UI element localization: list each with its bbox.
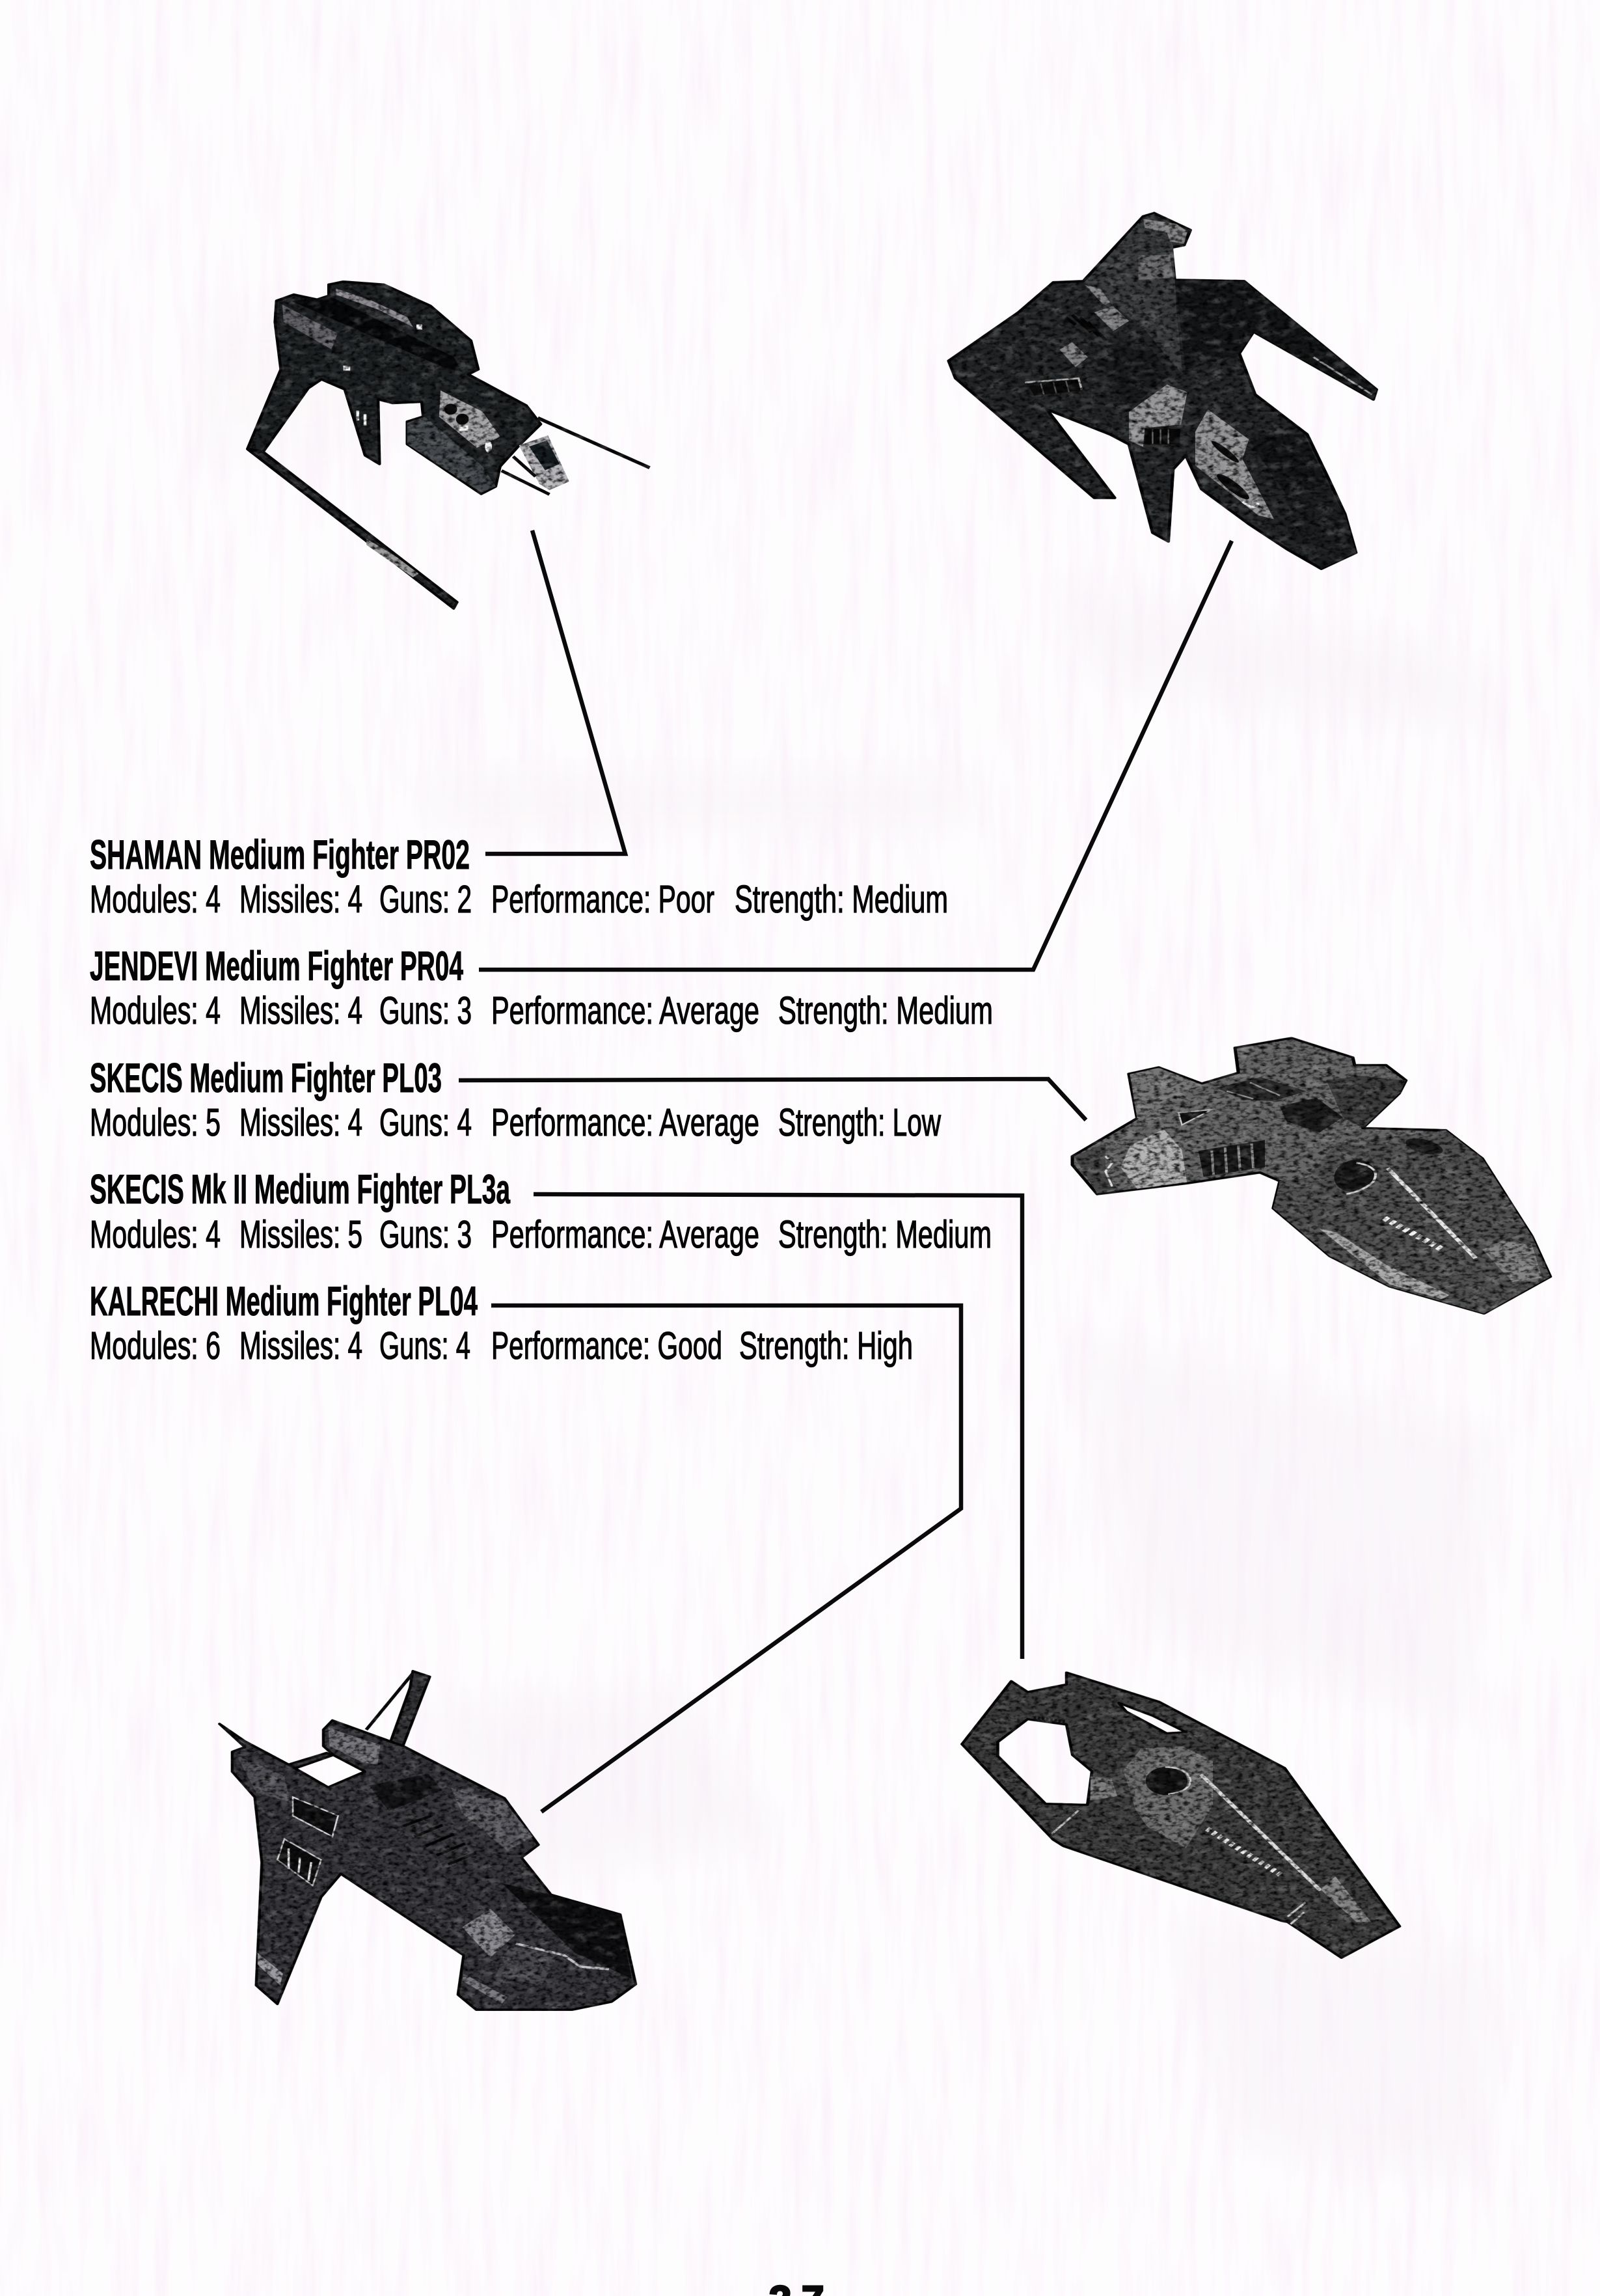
SHAMAN left facet [282, 305, 338, 349]
SKECIS lower wing [1273, 1130, 1551, 1313]
leader line: SHAMAN [485, 530, 625, 854]
leader line: SKECIS Mk II [534, 1194, 1022, 1659]
KALRECHI stats: Strength: High [739, 1324, 913, 1367]
SKECIS nose highlight [1105, 1156, 1112, 1186]
KALRECHI antenna [366, 1671, 429, 1746]
SHAMAN stats: Performance: Poor [491, 878, 714, 921]
SHAMAN dark stripe [291, 297, 463, 372]
SHAMAN long wing strut [248, 450, 457, 608]
SHAMAN title: SHAMAN Medium Fighter PR02 [90, 832, 470, 878]
SHAMAN nose [519, 435, 569, 490]
SKECIS Mk II stats: Modules: 4 [90, 1213, 221, 1256]
KALRECHI top hatch [369, 1774, 442, 1811]
KALRECHI title: KALRECHI Medium Fighter PL04 [90, 1279, 478, 1324]
JENDEVI central light panel [1129, 385, 1187, 447]
JENDEVI right wing [1174, 280, 1377, 400]
KALRECHI top fin [328, 1727, 381, 1764]
KALRECHI stats [90, 1324, 913, 1367]
SKECIS spine line [1388, 1168, 1476, 1258]
SHAMAN cockpit window [529, 441, 560, 471]
SKECIS Mk II tail highlight [1051, 1811, 1305, 1924]
JENDEVI top cap [1143, 219, 1187, 244]
JENDEVI vent 1 [1066, 315, 1105, 340]
KALRECHI right panel [451, 1788, 533, 1851]
SKECIS Mk II stats: Strength: Medium [778, 1213, 992, 1256]
SHAMAN lower block [407, 417, 496, 493]
KALRECHI nose highlights [516, 1943, 609, 1969]
SHAMAN strut mark [366, 539, 419, 577]
SKECIS Mk II title: SKECIS Mk II Medium Fighter PL3a [90, 1167, 511, 1212]
JENDEVI stats: Guns: 3 [379, 989, 472, 1032]
JENDEVI stats: Strength: Medium [778, 989, 993, 1032]
KALRECHI hull silhouette [219, 1721, 636, 2010]
SKECIS light wing edge [1320, 1229, 1449, 1300]
leader line: KALRECHI [491, 1305, 961, 1812]
SKECIS stats: Performance: Average [491, 1101, 759, 1144]
KALRECHI intake vent [293, 1797, 338, 1837]
KALRECHI stats: Missiles: 4 [239, 1324, 362, 1367]
SKECIS Mk II spine line [1201, 1775, 1320, 1891]
SKECIS nose [1074, 1143, 1117, 1194]
SKECIS stats [90, 1101, 941, 1144]
JENDEVI inner dark panel [1094, 336, 1170, 409]
spec block: JENDEVI [90, 944, 993, 1032]
KALRECHI stats: Modules: 6 [90, 1324, 221, 1367]
SKECIS title: SKECIS Medium Fighter PL03 [90, 1056, 442, 1101]
JENDEVI stats: Modules: 4 [90, 989, 221, 1032]
SKECIS Mk II side plate [1091, 1777, 1117, 1801]
SHAMAN top plate [336, 288, 413, 327]
SHAMAN stats: Strength: Medium [735, 878, 948, 921]
SKECIS Mk II stats [90, 1213, 992, 1256]
SHAMAN gun barrels [502, 456, 549, 495]
SKECIS engine ring [1329, 1156, 1380, 1195]
SKECIS top vent strip [1217, 1077, 1307, 1101]
KALRECHI wing root panel [236, 1755, 290, 1802]
JENDEVI stats: Missiles: 4 [239, 989, 362, 1032]
JENDEVI vent 2 [1025, 378, 1081, 396]
SHAMAN stats [90, 878, 948, 921]
JENDEVI highlight [1243, 502, 1258, 507]
leader line: JENDEVI [479, 541, 1232, 970]
KALRECHI stats: Guns: 4 [379, 1324, 470, 1367]
SHAMAN stats: Modules: 4 [90, 878, 221, 921]
SKECIS wing tail panel [1482, 1241, 1542, 1282]
JENDEVI stats: Performance: Average [491, 989, 759, 1032]
KALRECHI rear dark nose [502, 1883, 632, 1978]
SKECIS Mk II stats: Guns: 3 [379, 1213, 472, 1256]
SKECIS stats: Missiles: 4 [239, 1101, 362, 1144]
SKECIS stats: Modules: 5 [90, 1101, 221, 1144]
icon: KALRECHI fighter [219, 1671, 636, 2010]
icon: SHAMAN fighter [247, 282, 649, 608]
SKECIS Mk II frame comb [1034, 1718, 1066, 1723]
JENDEVI wing edge highlight [1314, 357, 1372, 394]
SKECIS upper block [1326, 1076, 1406, 1128]
SKECIS stats: Guns: 4 [379, 1101, 472, 1144]
SKECIS stats: Strength: Low [778, 1101, 941, 1144]
SHAMAN antenna line [538, 418, 649, 468]
JENDEVI hull silhouette [949, 213, 1377, 569]
SKECIS Mk II hull with cut-outs [962, 1673, 1400, 1958]
spec block: SKECIS [90, 1056, 941, 1144]
JENDEVI top column [1085, 214, 1182, 375]
SKECIS rear block [1130, 1068, 1202, 1121]
SKECIS hull silhouette [1072, 1038, 1551, 1313]
JENDEVI column panel [1139, 255, 1173, 280]
SKECIS Mk II tail plate [1320, 1876, 1371, 1922]
spec block: SKECIS Mk II [90, 1167, 992, 1256]
JENDEVI canopy [1249, 434, 1327, 495]
SHAMAN main hull [247, 282, 541, 494]
KALRECHI lower edge [462, 1974, 508, 2004]
KALRECHI mid light panel [462, 1909, 516, 1958]
JENDEVI stats [90, 989, 993, 1032]
KALRECHI central vent [403, 1816, 476, 1865]
SHAMAN stats: Guns: 2 [379, 878, 472, 921]
icon: JENDEVI fighter [949, 213, 1377, 569]
icon: SKECIS fighter [1072, 1038, 1551, 1313]
SHAMAN panel details [444, 403, 468, 424]
SHAMAN engine panel [439, 390, 500, 448]
KALRECHI wing tip light [258, 1953, 283, 1986]
JENDEVI grey blocks [1059, 285, 1129, 367]
SKECIS light panel [1120, 1129, 1187, 1189]
SKECIS Mk II engine [1146, 1767, 1191, 1795]
leader line: SKECIS [459, 1079, 1086, 1120]
JENDEVI title: JENDEVI Medium Fighter PR04 [90, 944, 463, 989]
JENDEVI cockpit side panel [1195, 409, 1274, 519]
SHAMAN stats: Missiles: 4 [239, 878, 362, 921]
SKECIS Mk II stats: Performance: Average [491, 1213, 759, 1256]
KALRECHI left strut [289, 1753, 332, 1768]
KALRECHI wing window [277, 1839, 321, 1885]
JENDEVI nose [1277, 485, 1356, 569]
icon: SKECIS Mk II fighter [962, 1673, 1400, 1958]
SKECIS top wing intake [1402, 1135, 1446, 1158]
SKECIS Mk II stats: Missiles: 5 [239, 1213, 362, 1256]
SKECIS engine bay [1280, 1098, 1343, 1132]
SKECIS side vent [1199, 1140, 1265, 1177]
spec block: KALRECHI [90, 1279, 913, 1367]
JENDEVI engine slots [1209, 439, 1253, 502]
SKECIS Mk II central facets [1123, 1746, 1213, 1848]
SHAMAN highlights [343, 325, 492, 452]
SKECIS canopy triangle [1178, 1110, 1212, 1125]
KALRECHI stats: Performance: Good [491, 1324, 722, 1367]
spec block: SHAMAN [90, 832, 948, 921]
SKECIS Mk II dotted row [1207, 1829, 1282, 1876]
JENDEVI vent 3 [1145, 429, 1180, 444]
SKECIS dotted row [1385, 1218, 1443, 1250]
KALRECHI nose panel [496, 1946, 558, 1986]
